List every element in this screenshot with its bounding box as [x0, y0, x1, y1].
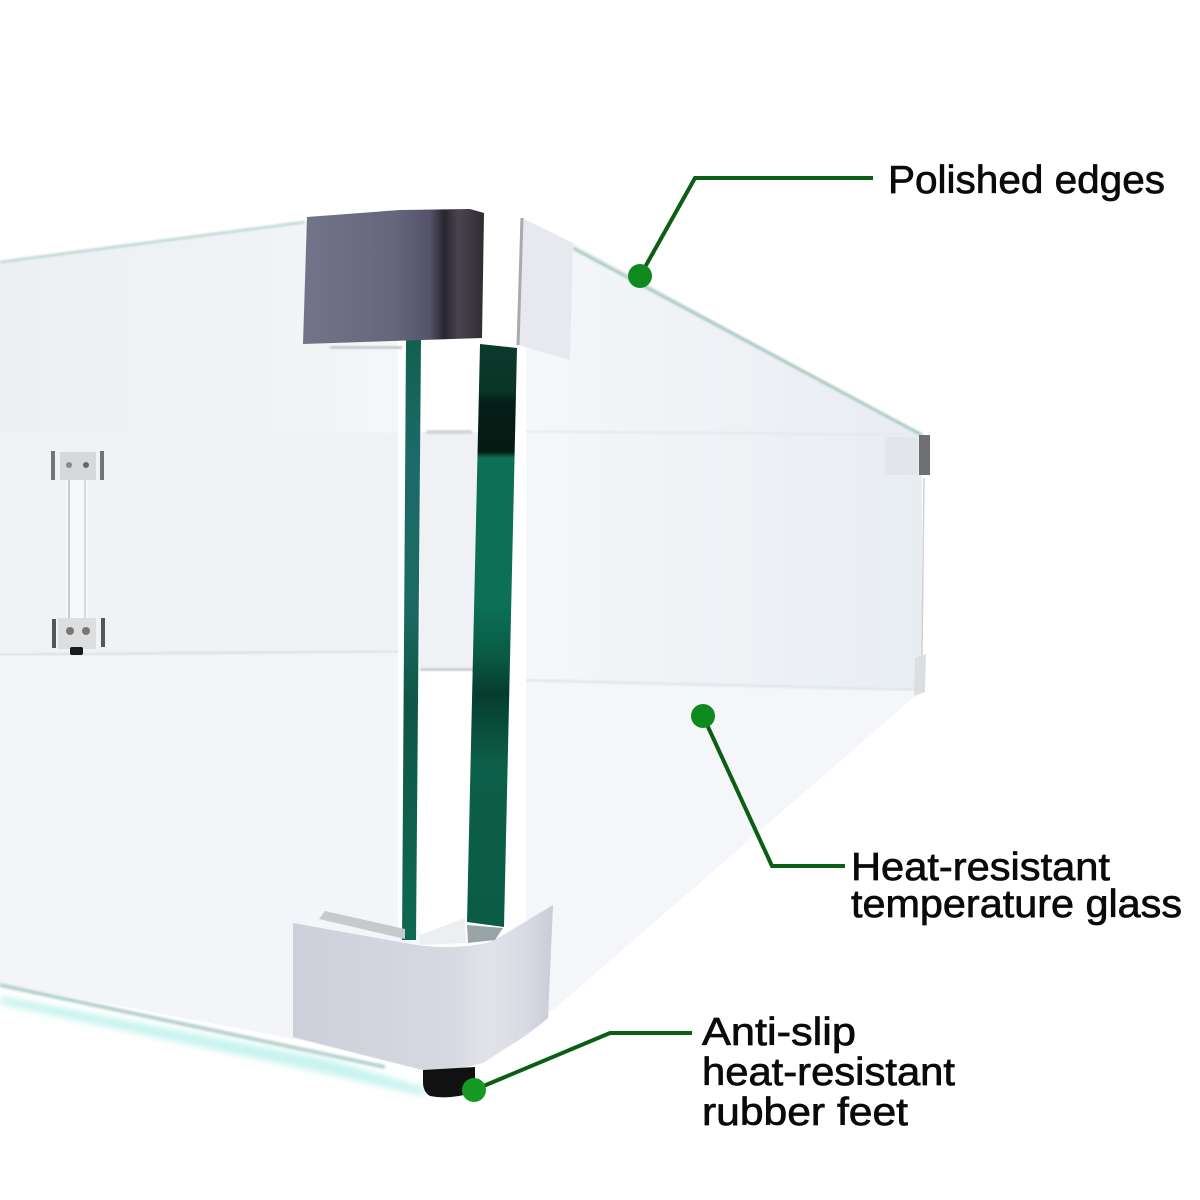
glass post: left green edge [402, 340, 421, 940]
icon: black rubber foot [423, 1067, 475, 1097]
bottom clip: metal corner bracket [293, 905, 553, 1070]
back post: small clips and rod [51, 451, 105, 655]
callout: polished edges [628, 159, 1165, 288]
callout: heat-resistant glass [691, 704, 1182, 926]
callout: rubber feet [462, 1011, 955, 1134]
top clip: light side face [518, 218, 573, 360]
glass post: right green edge [467, 344, 517, 927]
top clip: shelf reflection [330, 346, 402, 349]
callout: rubber feet: rubber feet [702, 1091, 908, 1134]
callout: rubber feet: Anti-slip [702, 1011, 856, 1054]
panel: left glass pane [0, 222, 420, 1070]
callout: heat-resistant glass: temperature glass [851, 883, 1182, 926]
panel: right glass pane [520, 222, 924, 1030]
callout: polished edges: Polished edges [888, 159, 1165, 202]
glass bottom edge and teal glow [0, 985, 425, 1096]
white highlight around post [398, 340, 526, 930]
callout: heat-resistant glass: Heat-resistant [851, 846, 1110, 889]
right clips on far corner [885, 435, 930, 696]
top clip: dark mirrored face [303, 209, 484, 344]
callout: rubber feet: heat-resistant [702, 1051, 955, 1094]
